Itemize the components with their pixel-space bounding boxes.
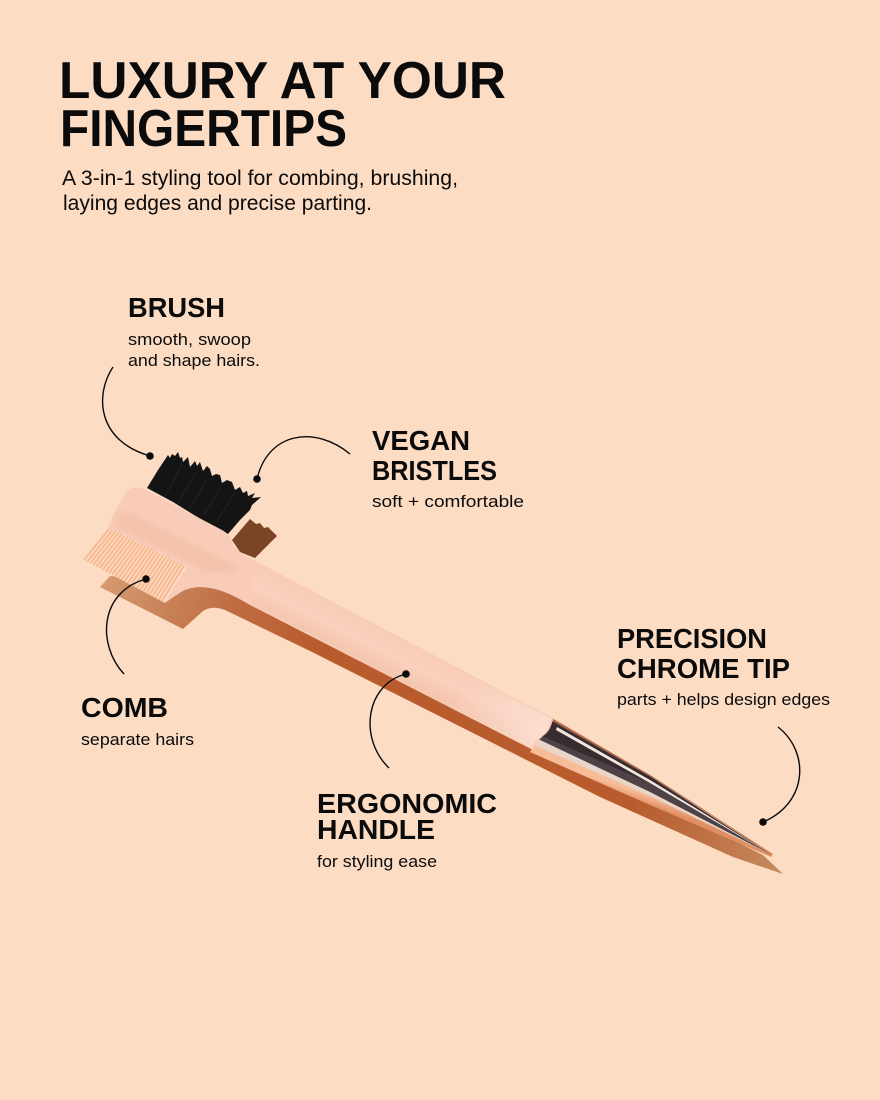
heading: brush: BRUSH <box>128 292 225 323</box>
text: comb description: separate hairs <box>81 730 194 749</box>
heading: ergonomic handle <box>317 788 497 845</box>
title: LUXURY AT YOUR <box>59 52 506 110</box>
title <box>59 52 506 158</box>
callout: ergonomic handle <box>317 670 497 871</box>
callout: precision chrome tip <box>617 623 830 826</box>
text: brush description: smooth, swoop <box>128 330 251 349</box>
callout: comb <box>81 575 194 749</box>
product illustration: brush and comb tool <box>84 452 783 874</box>
heading: precision chrome tip: PRECISION <box>617 623 767 654</box>
handle and head <box>108 487 553 750</box>
arrow: vegan bristles <box>253 437 350 483</box>
intro text: A 3-in-1 styling tool for combing, brushing, <box>62 167 458 190</box>
text: handle description: for styling ease <box>317 852 437 871</box>
heading: comb: COMB <box>81 692 168 723</box>
arrow: chrome tip <box>759 727 800 826</box>
heading: precision chrome tip <box>617 623 790 684</box>
cast shadows <box>100 519 783 874</box>
heading: vegan bristles: BRISTLES <box>372 455 497 486</box>
handle end highlight <box>450 676 551 748</box>
callout: vegan bristles <box>253 425 524 511</box>
text: brush description <box>128 330 260 370</box>
arrow: handle <box>370 670 410 768</box>
text: vegan bristles description: soft + comfortable <box>372 492 524 511</box>
comb teeth <box>84 528 187 603</box>
title: FINGERTIPS <box>60 100 347 158</box>
text: brush description: and shape hairs. <box>128 351 260 370</box>
handle shaft shading <box>252 561 551 748</box>
arrow: brush <box>103 367 154 460</box>
heading: vegan bristles <box>372 425 497 486</box>
callout: brush <box>103 292 260 460</box>
head recess <box>114 512 238 572</box>
text: chrome tip description: parts + helps design edges <box>617 690 830 709</box>
intro text: laying edges and precise parting. <box>63 192 372 215</box>
bristles <box>147 452 261 534</box>
heading: ergonomic handle: ERGONOMIC <box>317 788 497 819</box>
heading: precision chrome tip: CHROME TIP <box>617 653 790 684</box>
intro text <box>62 167 458 215</box>
heading: vegan bristles: VEGAN <box>372 425 470 456</box>
arrow: comb <box>107 575 150 674</box>
chrome tip <box>530 718 773 857</box>
heading: ergonomic handle: HANDLE <box>317 814 435 845</box>
